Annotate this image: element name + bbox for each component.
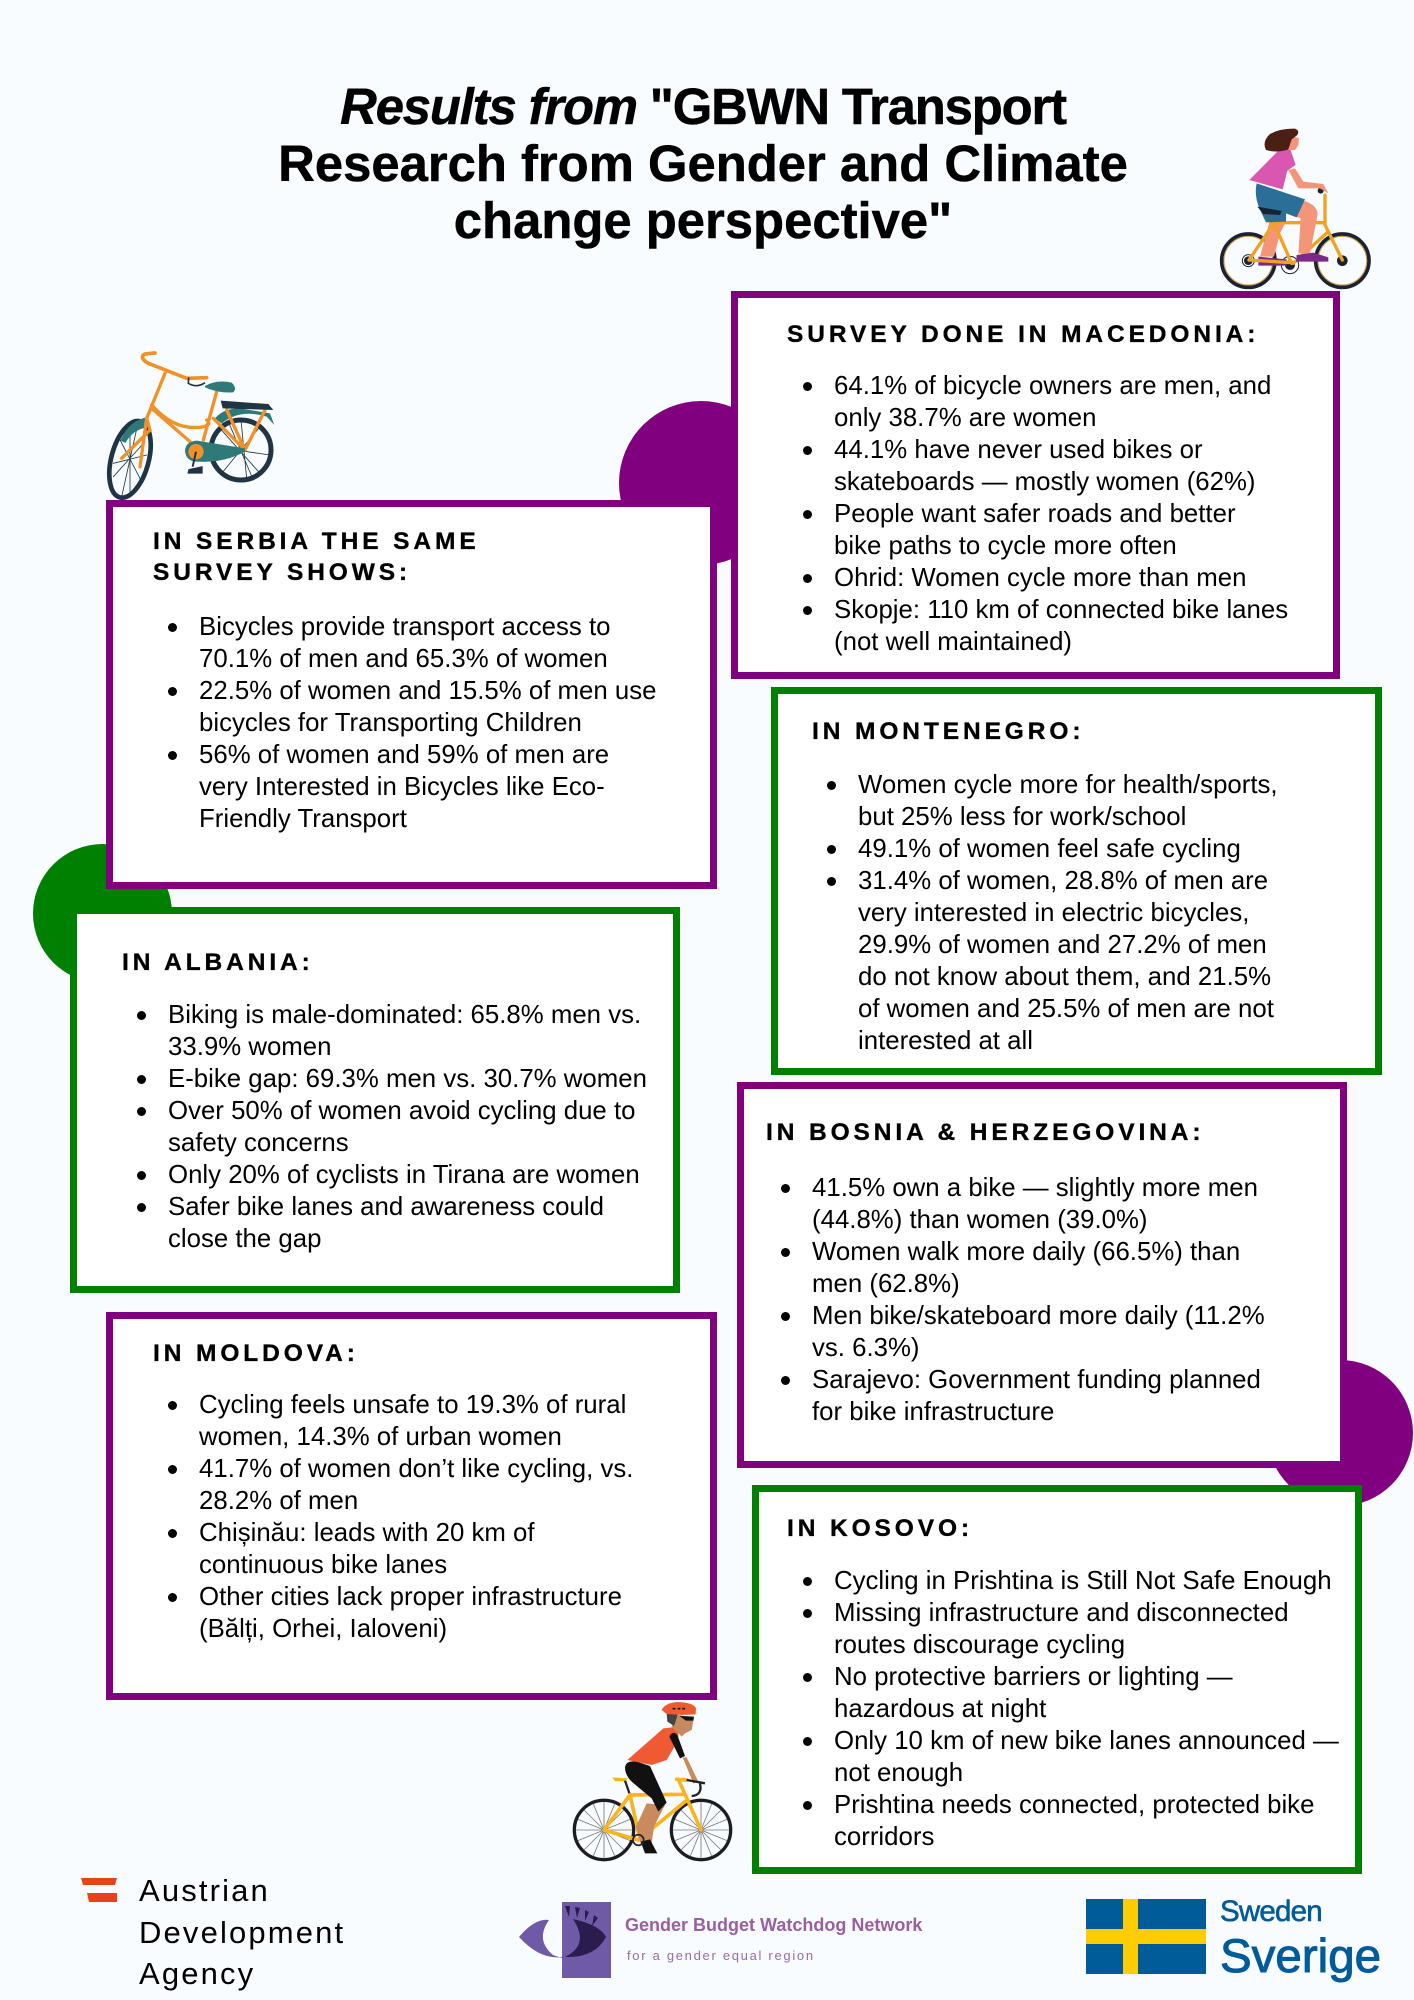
decorative circle: purple behind Macedonia panel: [619, 401, 783, 565]
text block: Macedonia findings: Skopje: 110 km of connected bike lanes: [834, 596, 1288, 624]
text block: Macedonia findings: Ohrid: Women cycle more than men: [834, 564, 1246, 592]
text block: Kosovo findings: hazardous at night: [834, 1695, 1046, 1723]
text block: Kosovo findings: corridors: [834, 1823, 934, 1851]
panel: Bosnia and Herzegovina: [737, 1082, 1347, 1468]
text block: Montenegro findings: [827, 771, 1278, 1055]
text block: Moldova findings: women, 14.3% of urban women: [199, 1423, 562, 1451]
text: agency name: [139, 1873, 345, 1991]
text block: Serbia findings: Bicycles provide transport access to: [199, 613, 610, 641]
text: agency name: Austrian: [139, 1873, 270, 1908]
text block: Bosnia findings: vs. 6.3%): [812, 1334, 920, 1362]
decorative circle: purple behind Bosnia panel: [1267, 1360, 1413, 1506]
text block: Moldova findings: Chișinău: leads with 20 km of: [199, 1519, 535, 1547]
text block: Serbia findings: 70.1% of men and 65.3% of women: [199, 645, 608, 673]
panel: Kosovo: [752, 1485, 1362, 1874]
text block: Albania findings: Safer bike lanes and awareness could: [168, 1193, 604, 1221]
text block: Moldova findings: 41.7% of women don’t like cycling, vs.: [199, 1455, 633, 1483]
text block: Albania findings: E-bike gap: 69.3% men vs. 30.7% women: [168, 1065, 647, 1093]
title: change perspective": [454, 192, 952, 249]
title: [278, 78, 1128, 249]
text block: Kosovo findings: not enough: [834, 1759, 963, 1787]
heading: Montenegro: IN MONTENEGRO:: [812, 718, 1084, 745]
text block: Bosnia findings: Sarajevo: Government funding planned: [812, 1366, 1261, 1394]
text block: Moldova findings: continuous bike lanes: [199, 1551, 447, 1579]
heading: Macedonia: SURVEY DONE IN MACEDONIA:: [787, 321, 1259, 348]
logo: Sweden Sverige: [1086, 1895, 1381, 1983]
text: agency name: Development: [139, 1914, 345, 1950]
text: network name: Gender Budget Watchdog Network: [625, 1915, 922, 1935]
text block: Macedonia findings: 64.1% of bicycle owners are men, and: [834, 372, 1271, 400]
text block: Albania findings: 33.9% women: [168, 1033, 331, 1061]
heading: Serbia: SURVEY SHOWS:: [153, 558, 411, 586]
text block: Albania findings: Biking is male-dominated: 65.8% men vs.: [168, 1001, 641, 1029]
text block: Bosnia findings: men (62.8%): [812, 1270, 960, 1298]
text block: Macedonia findings: only 38.7% are women: [834, 404, 1096, 432]
text block: Macedonia findings: 44.1% have never used bikes or: [834, 436, 1203, 464]
text block: Montenegro findings: very interested in electric bicycles,: [858, 899, 1249, 927]
panel: Macedonia survey: [731, 291, 1340, 679]
icon: woman on bicycle: [1220, 128, 1371, 290]
text: Sverige: Sverige: [1220, 1930, 1381, 1983]
text block: Montenegro findings: interested at all: [858, 1027, 1033, 1055]
text block: Serbia findings: 22.5% of women and 15.5% of men use: [199, 677, 656, 705]
text block: Macedonia findings: skateboards — mostly women (62%): [834, 468, 1256, 496]
text block: Bosnia findings: 41.5% own a bike — slightly more men: [812, 1174, 1258, 1202]
text block: Kosovo findings: [803, 1567, 1339, 1851]
text block: Albania findings: close the gap: [168, 1225, 321, 1253]
text block: Montenegro findings: Women cycle more for health/sports,: [858, 771, 1278, 799]
text block: Albania findings: safety concerns: [168, 1129, 349, 1157]
text block: Serbia findings: [168, 613, 656, 833]
icon: cyclist with helmet: [572, 1702, 732, 1862]
text block: Kosovo findings: Only 10 km of new bike lanes announced —: [834, 1727, 1339, 1755]
text: Sweden: Sweden: [1220, 1895, 1322, 1928]
text block: Macedonia findings: [803, 372, 1288, 656]
icon: eye on purple rectangle: [519, 1902, 611, 1978]
icon: Swedish flag: [1086, 1899, 1206, 1974]
text: agency name: Agency: [139, 1956, 255, 1991]
panel: Albania: [70, 907, 680, 1293]
text block: Bosnia findings: [781, 1174, 1265, 1426]
text block: Serbia findings: 56% of women and 59% of men are: [199, 741, 609, 769]
text block: Bosnia findings: Men bike/skateboard more daily (11.2%: [812, 1302, 1265, 1330]
text block: Macedonia findings: People want safer roads and better: [834, 500, 1236, 528]
heading: Bosnia and Herzegovina: IN BOSNIA & HERZEGOVINA:: [766, 1119, 1204, 1146]
text block: Moldova findings: Cycling feels unsafe to 19.3% of rural: [199, 1391, 626, 1419]
text block: Moldova findings: 28.2% of men: [199, 1487, 358, 1515]
heading: Kosovo: IN KOSOVO:: [787, 1515, 973, 1542]
icon: Austrian flag stripes: [81, 1878, 117, 1902]
text block: Kosovo findings: routes discourage cycling: [834, 1631, 1125, 1659]
text block: Moldova findings: (Bălți, Orhei, Ialoveni): [199, 1615, 447, 1643]
text: tagline: for a gender equal region: [627, 1948, 815, 1963]
heading: Albania: IN ALBANIA:: [122, 949, 314, 976]
text block: Bosnia findings: Women walk more daily (66.5%) than: [812, 1238, 1240, 1266]
text block: Serbia findings: very Interested in Bicycles like Eco-: [199, 773, 605, 801]
text block: Macedonia findings: (not well maintained): [834, 628, 1072, 656]
text block: Montenegro findings: do not know about them, and 21.5%: [858, 963, 1271, 991]
text block: Moldova findings: [168, 1391, 633, 1643]
text block: Kosovo findings: Prishtina needs connected, protected bike: [834, 1791, 1314, 1819]
panel: Montenegro: [771, 687, 1382, 1075]
text block: Albania findings: Over 50% of women avoid cycling due to: [168, 1097, 635, 1125]
text block: Bosnia findings: for bike infrastructure: [812, 1398, 1054, 1426]
panel: Serbia survey: [106, 500, 717, 889]
title: Research from Gender and Climate: [278, 135, 1128, 192]
text block: Albania findings: Only 20% of cyclists in Tirana are women: [168, 1161, 640, 1189]
icon: orange and teal bicycle: [106, 351, 274, 500]
text block: Moldova findings: Other cities lack proper infrastructure: [199, 1583, 622, 1611]
text block: Montenegro findings: but 25% less for work/school: [858, 803, 1186, 831]
heading: Moldova: IN MOLDOVA:: [153, 1340, 359, 1367]
logo: Austrian Development Agency: [81, 1873, 345, 1991]
text block: Macedonia findings: bike paths to cycle more often: [834, 532, 1177, 560]
title: Results from "GBWN Transport: [340, 78, 1066, 135]
text block: Albania findings: [137, 1001, 647, 1253]
heading: Serbia: IN SERBIA THE SAME: [153, 528, 480, 555]
panel: Moldova: [106, 1312, 717, 1700]
decorative circle: green behind Albania panel: [33, 844, 172, 983]
text block: Montenegro findings: of women and 25.5% of men are not: [858, 995, 1274, 1023]
text block: Montenegro findings: 49.1% of women feel safe cycling: [858, 835, 1241, 863]
text block: Kosovo findings: Cycling in Prishtina is Still Not Safe Enough: [834, 1567, 1332, 1595]
text block: Serbia findings: Friendly Transport: [199, 805, 407, 833]
text block: Montenegro findings: 29.9% of women and 27.2% of men: [858, 931, 1267, 959]
text block: Montenegro findings: 31.4% of women, 28.8% of men are: [858, 867, 1268, 895]
text block: Bosnia findings: (44.8%) than women (39.0%): [812, 1206, 1148, 1234]
text block: Kosovo findings: Missing infrastructure and disconnected: [834, 1599, 1289, 1627]
logo: Gender Budget Watchdog Network: [519, 1902, 922, 1978]
text block: Serbia findings: bicycles for Transporting Children: [199, 709, 582, 737]
text block: Kosovo findings: No protective barriers or lighting —: [834, 1663, 1233, 1691]
heading: Serbia: [153, 528, 480, 586]
